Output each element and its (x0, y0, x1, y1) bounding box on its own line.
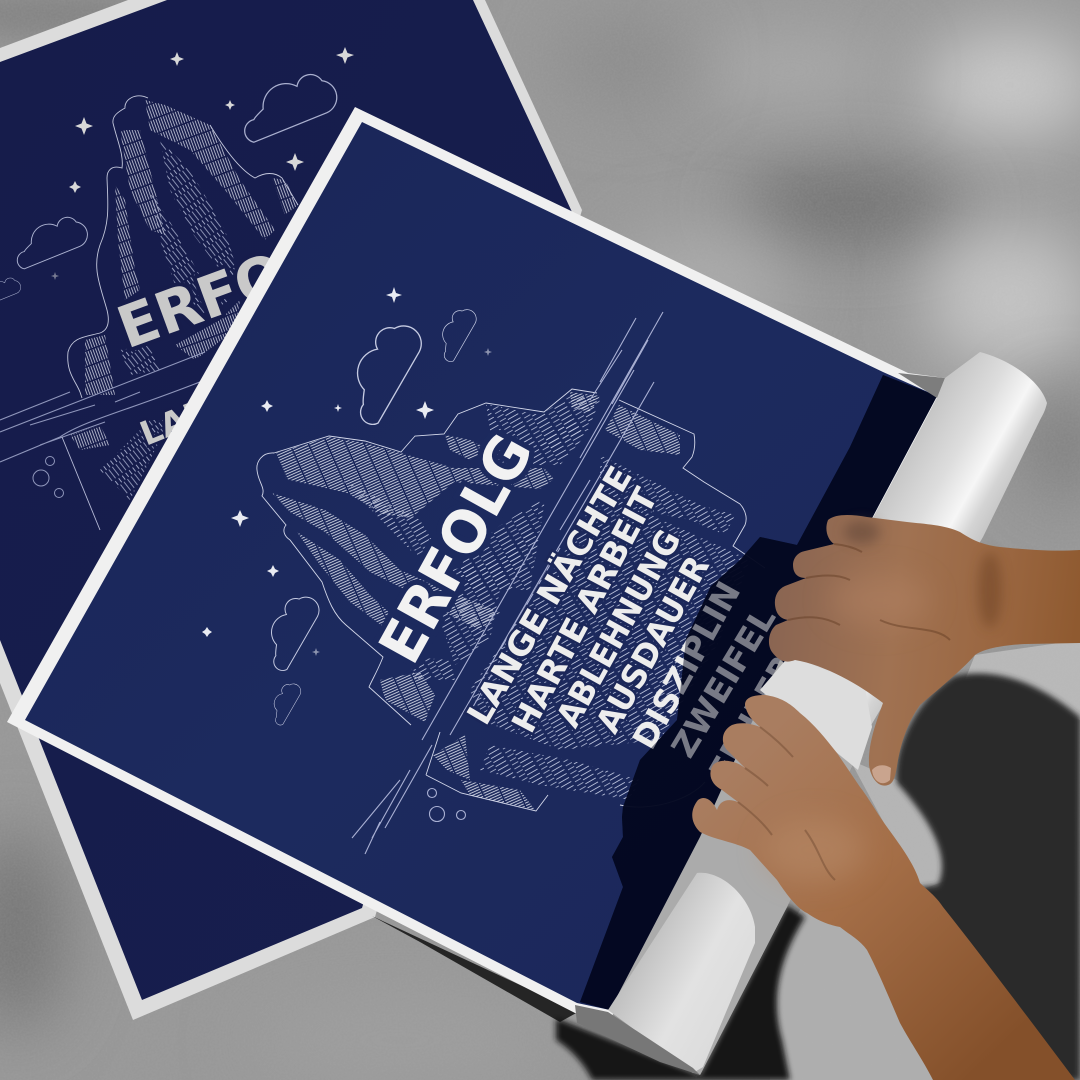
upper hand creases (788, 544, 950, 640)
roll lit patch under thumb (760, 655, 872, 770)
struggle list: ABLEHNUNG (548, 523, 689, 733)
sea band (352, 312, 663, 854)
back poster iceberg (0, 96, 298, 530)
iceberg illustration (257, 312, 937, 1010)
shadow over text (580, 375, 937, 1010)
roll flap top (898, 373, 945, 398)
hard shadow lower right (556, 673, 1080, 1080)
struggle list: DISZIPLIN (625, 575, 748, 756)
lower hand (692, 695, 1075, 1080)
struggle list: LANGE NÄCHTE (458, 459, 640, 731)
back poster list text: LANGE NÄCHTE (134, 309, 414, 453)
back poster (0, 0, 582, 1020)
roll shaded lower section (610, 660, 870, 1075)
headline ERFOLG: ERFOLG (366, 423, 546, 674)
roll lower lit patch (608, 873, 755, 1073)
stars (202, 287, 492, 656)
front poster frame (7, 107, 945, 1020)
roll body (610, 352, 1047, 1075)
struggle list: HARTE ARBEIT (504, 481, 666, 739)
struggle list: FEHLER (701, 649, 804, 788)
struggle list: ZWEIFEL (663, 600, 783, 764)
roll flap bottom (575, 1005, 700, 1075)
paper roll (575, 352, 1047, 1075)
front poster contact shadow (372, 916, 578, 1022)
front poster sheet (25, 122, 937, 1010)
upper hand shading (844, 520, 880, 544)
lower hand creases (738, 727, 835, 880)
back poster frame (0, 0, 582, 1020)
back poster clouds (0, 66, 342, 306)
hand shadow on poster (580, 375, 937, 1010)
lower hand highlight (765, 818, 865, 882)
upper thumb nail (872, 765, 891, 783)
struggle list (458, 459, 804, 788)
upper hand (769, 515, 1080, 786)
bubbles (428, 788, 466, 822)
back poster sheet (0, 0, 572, 1000)
lit concrete lower right (965, 640, 1080, 720)
struggle list: AUSDAUER (588, 549, 717, 739)
clouds (255, 303, 480, 726)
iceberg outline (257, 389, 765, 811)
back poster title: ERFOLG (109, 210, 374, 362)
back poster stars (51, 47, 354, 280)
